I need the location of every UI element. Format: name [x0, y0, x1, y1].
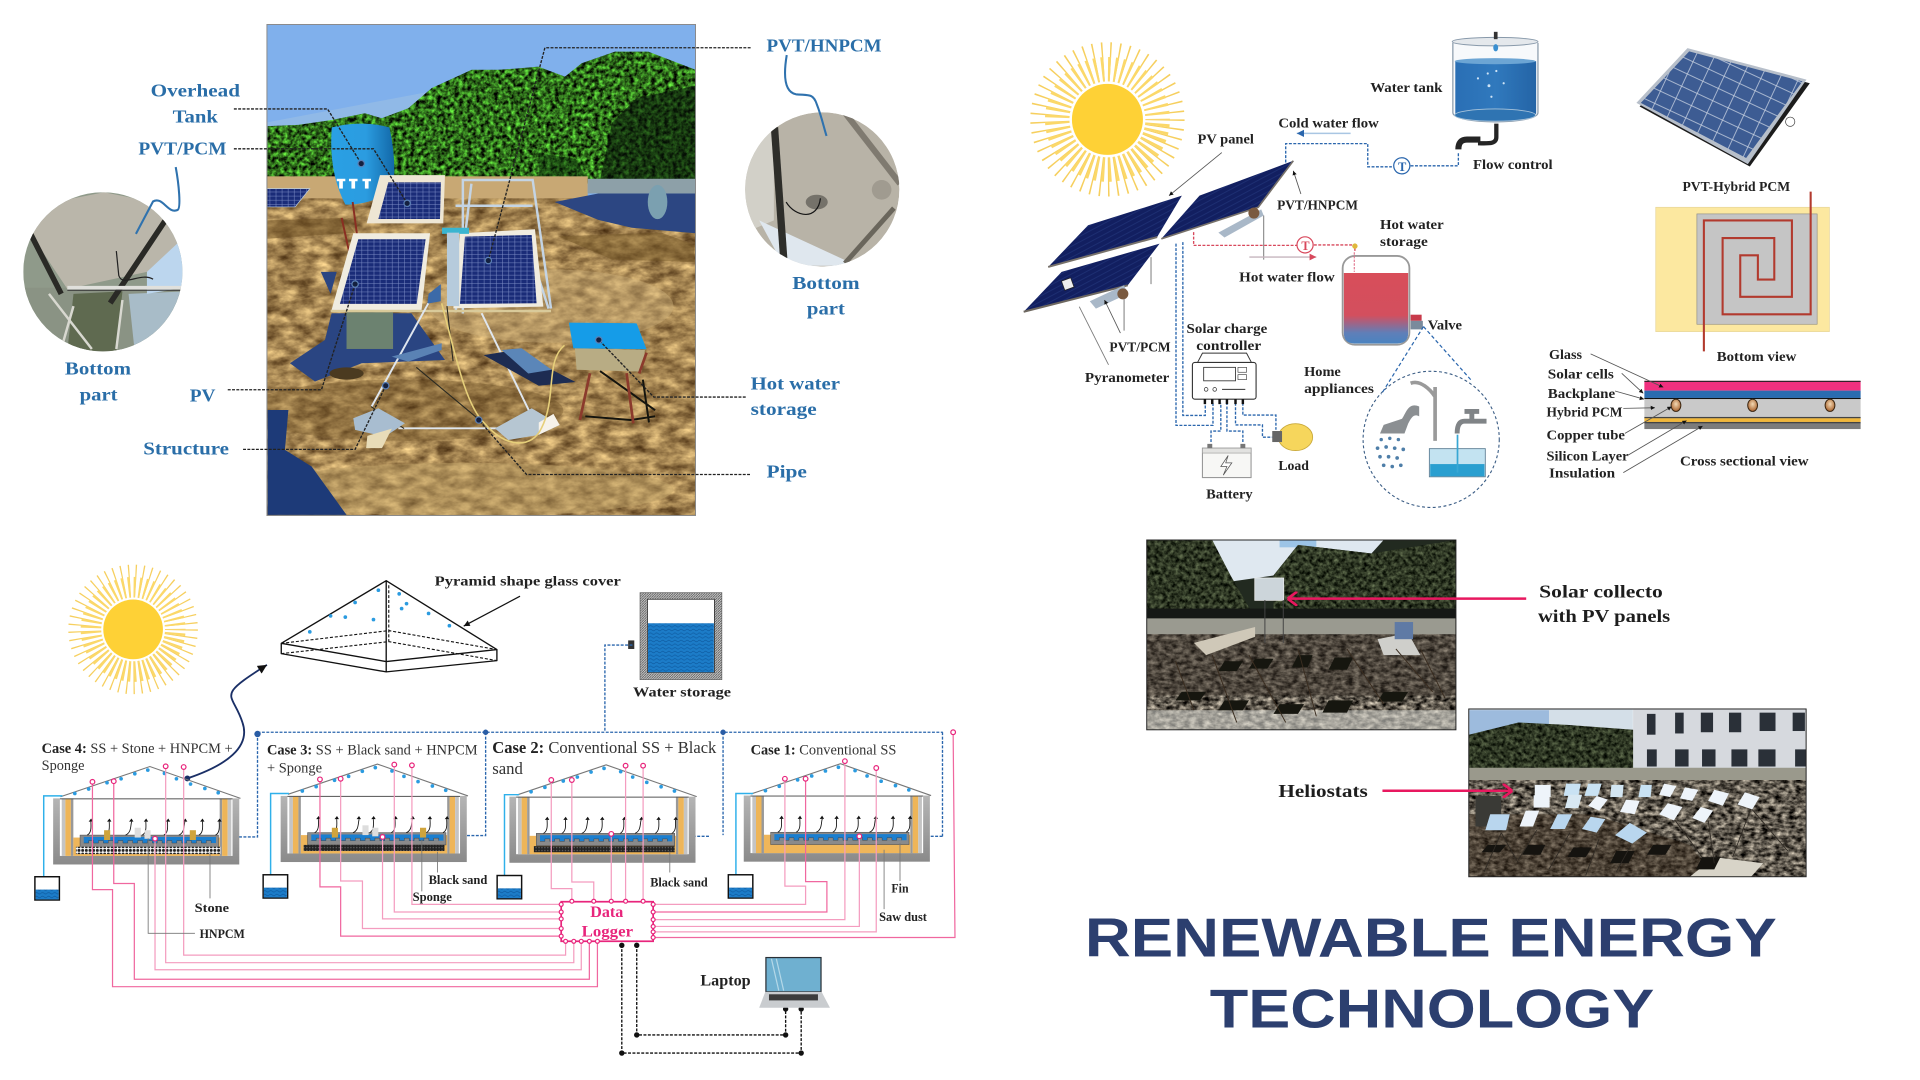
labels: layers: Backplane: [1548, 386, 1615, 402]
labels: still components: Sponge: [413, 890, 452, 904]
water tank barrel: [331, 124, 394, 205]
hot water flow line: T: [1301, 239, 1310, 253]
stand and feet: [372, 303, 538, 430]
arrows: schematic pointers: [1079, 153, 1301, 365]
leader lines with callout dots: [228, 48, 751, 474]
label: Laptop: Laptop: [700, 973, 751, 990]
icon: PV panels array: [1024, 161, 1293, 331]
labels: layers: Hybrid PCM: [1547, 404, 1622, 420]
labels: photo callouts: storage: [751, 399, 817, 419]
icon: laptop: [759, 958, 830, 1008]
labels: case titles: Case 3: SS + Black sand + HNPCM: [267, 742, 478, 758]
labels: photo callouts: PVT/PCM: [138, 138, 227, 158]
labels: layers: Glass: [1549, 347, 1583, 363]
icon: water storage tank: [628, 593, 722, 680]
labels: schematic: appliances: [1304, 381, 1374, 397]
icon: sun: [85, 581, 181, 678]
panel: heliostat field photos: [1147, 540, 1807, 877]
icon: tap: [1411, 382, 1435, 441]
labels: case titles: sand: [492, 759, 524, 778]
icon: faucet and basin: [1429, 409, 1487, 477]
label: Bottom view: Bottom view: [1717, 349, 1797, 365]
curve: left inset connector: [136, 167, 179, 234]
diagram: case 2 still: [497, 765, 697, 899]
icon: water tank and faucet: [1452, 32, 1538, 149]
hot water flow line: [1194, 232, 1358, 257]
labels: still components: Fin: [891, 882, 909, 896]
labels: still components: [195, 873, 928, 941]
label: Solar collector: with PV panels: [1538, 606, 1670, 626]
photo: solar collector with PV panels: [1147, 540, 1456, 730]
labels: photo callouts: Structure: [143, 438, 229, 458]
label: PVT-Hybrid PCM: PVT-Hybrid PCM: [1682, 179, 1790, 195]
home appliances dashed circle: [1363, 327, 1499, 507]
photo: left bottom-part inset circle: [23, 192, 184, 351]
dashed wiring to charge controller: [1176, 242, 1276, 442]
hot water storage table: [585, 371, 655, 422]
labels: still components: Saw dust: [879, 910, 928, 924]
labels: photo callouts: part: [807, 299, 846, 319]
diagram: case 1 still: [728, 764, 931, 898]
labels: schematic: controller: [1196, 338, 1261, 354]
labels: schematic: Valve: [1428, 317, 1462, 333]
icon: pyramid glass cover: [281, 581, 497, 672]
label: Heliostats: Heliostats: [1278, 781, 1368, 801]
icon: solar charge controller: [1192, 353, 1256, 404]
labels: schematic: Pyranometer: [1085, 370, 1169, 386]
labels: still components: HNPCM: [200, 927, 245, 941]
labels: case titles: Case 4: SS + Stone + HNPCM +: [42, 741, 233, 757]
labels: schematic: Cold water flow: [1278, 115, 1380, 131]
labels: schematic: PV panel: [1198, 131, 1254, 147]
black dashed data cables: [619, 943, 804, 1056]
diagram: case 3 still: [263, 764, 468, 898]
label: Solar collector: Solar collecto: [1539, 582, 1663, 602]
label: Pyramid shape glass cover: Pyramid shape glass cover: [435, 573, 621, 589]
labels: layers: Silicon Layer: [1547, 448, 1629, 464]
title: [1085, 906, 1777, 1039]
curve: right inset connector: [785, 55, 827, 136]
labels: still components: Stone: [195, 901, 229, 915]
labels: layers: Cross sectional view: [1680, 453, 1809, 469]
labels: photo callouts: Bottom: [792, 273, 860, 293]
icon: hot water storage tank with valve: [1343, 252, 1423, 345]
panel: solar still experimental cases: [35, 573, 955, 1056]
curve: connector from case 4 to pyramid: [184, 665, 267, 781]
labels: layers: Copper tube: [1547, 428, 1625, 444]
arrows: layer pointers: [1591, 354, 1703, 473]
photo: rooftop PVT setup: [245, 24, 696, 517]
labels: schematic: PVT/HNPCM: [1277, 197, 1358, 213]
diagram: case 4 still: [35, 767, 240, 900]
icon: sun: [1050, 62, 1165, 177]
labels: schematic: Hot water: [1380, 217, 1444, 233]
labels: case titles: Case 2: Conventional SS + Black: [492, 738, 717, 757]
PV panels: [367, 175, 445, 223]
arrow: to heliostats: [1382, 790, 1512, 792]
icon: light bulb load: [1272, 424, 1313, 451]
labels: schematic: Flow control: [1473, 157, 1553, 173]
image: PVT hybrid panel: [1636, 48, 1810, 167]
box: data logger: Logger: [582, 924, 633, 941]
labels: schematic: PVT/PCM: [1109, 339, 1171, 355]
labels: schematic: storage: [1380, 234, 1428, 250]
label: Solar collector: [1538, 582, 1670, 626]
labels: schematic: Hot water flow: [1239, 270, 1336, 286]
labels: layers: Solar cells: [1548, 366, 1614, 382]
diagram: bottom view spiral tube: [1656, 192, 1829, 351]
photo: right bottom-part inset circle: [744, 112, 900, 267]
labels: layers: [1547, 347, 1809, 482]
photo: heliostats: [1469, 709, 1807, 877]
labels: schematic: Water tank: [1370, 80, 1443, 96]
icon: shower: [1376, 405, 1419, 468]
cold water flow line: [1286, 133, 1458, 174]
labels: photo callouts: Pipe: [767, 462, 807, 482]
labels: case titles: + Sponge: [267, 761, 323, 777]
labels: photo callouts: [65, 35, 882, 482]
labels: layers: Insulation: [1549, 466, 1615, 482]
arrow: to pyramid cover: [464, 596, 520, 626]
heliostat mirrors: [1485, 784, 1760, 844]
leader lines: still components: [148, 838, 900, 933]
panel: PVT field photo with callouts: [23, 24, 900, 517]
diagram: cross-sectional layers: [1644, 381, 1861, 429]
labels: still components: Black sand: [650, 876, 708, 890]
wiring: sensors to data logger: [90, 730, 955, 987]
labels: photo callouts: Overhead: [151, 81, 240, 101]
cold water flow line: T: [1398, 160, 1406, 174]
labels: photo callouts: PV: [190, 386, 216, 406]
labels: schematic: Load: [1278, 458, 1309, 474]
labels: case titles: Sponge: [42, 758, 85, 774]
labels: schematic: Solar charge: [1187, 321, 1267, 337]
frame rails: [456, 180, 551, 313]
labels: case titles: Case 1: Conventional SS: [751, 742, 896, 758]
panel: PVT system schematic: [1024, 32, 1553, 507]
box: data logger: [559, 899, 655, 943]
dashed water distribution lines: [212, 645, 943, 837]
labels: schematic: Home: [1304, 364, 1341, 380]
labels: case titles: [42, 738, 896, 778]
labels: photo callouts: PVT/HNPCM: [767, 35, 882, 55]
labels: schematic: [1085, 80, 1553, 502]
labels: schematic: Battery: [1206, 486, 1253, 502]
title: RENEWABLE ENERGY: [1085, 906, 1777, 968]
labels: photo callouts: part: [80, 384, 119, 404]
icon: battery: [1202, 444, 1251, 478]
panel: PVT hybrid PCM module detail: [1547, 48, 1861, 482]
labels: still components: Black sand: [429, 873, 487, 887]
box: data logger: Data: [590, 904, 623, 921]
labels: photo callouts: Hot water: [751, 373, 840, 393]
arrow: to solar collector: [1288, 598, 1526, 600]
title: TECHNOLOGY: [1210, 977, 1654, 1039]
label: Water storage: Water storage: [633, 685, 731, 701]
labels: photo callouts: Bottom: [65, 359, 131, 379]
labels: photo callouts: Tank: [173, 106, 219, 126]
